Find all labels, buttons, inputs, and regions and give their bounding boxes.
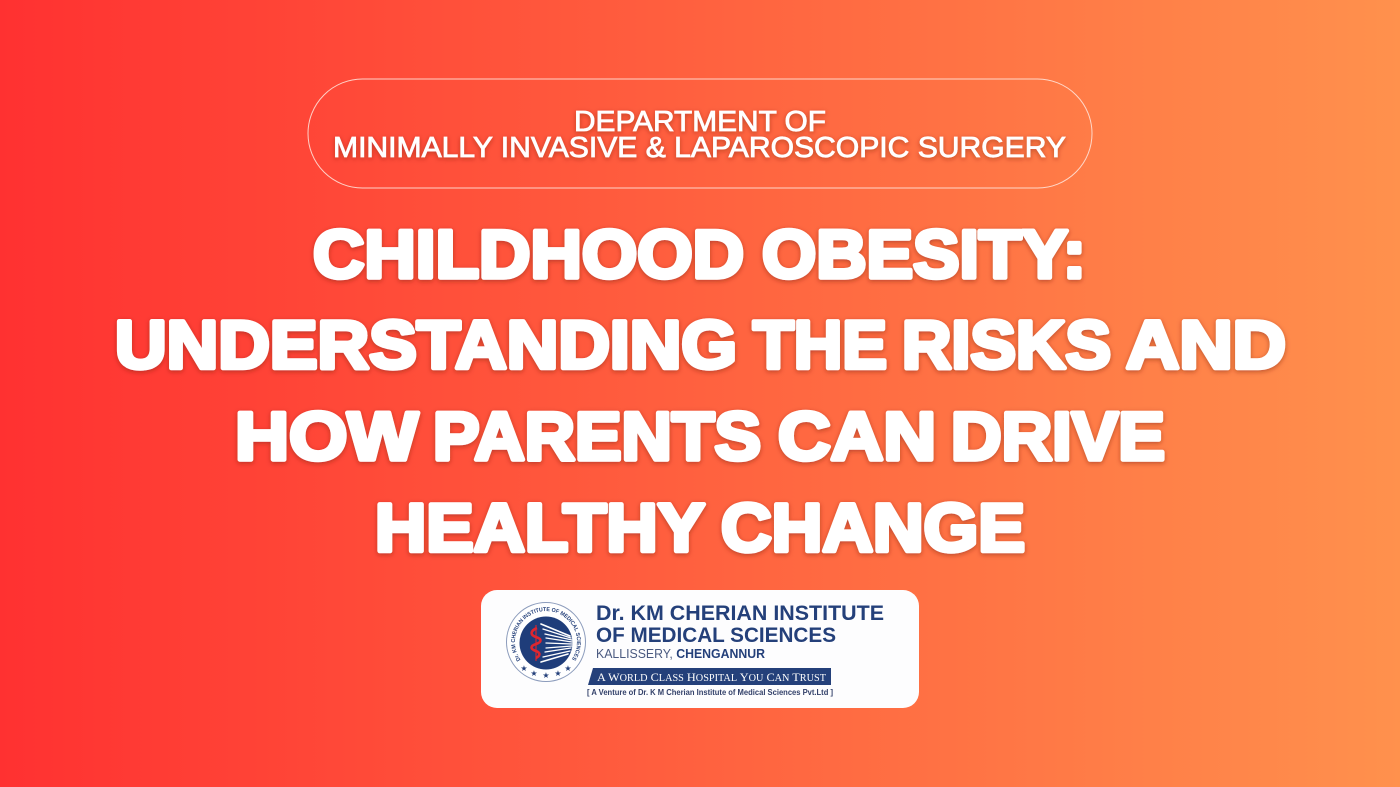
tagline banner: A WORLD CLASS HOSPITAL YOU CAN TRUST	[597, 670, 826, 684]
department text: DEPARTMENT OF	[574, 106, 826, 138]
card background	[481, 590, 919, 708]
title	[115, 217, 1286, 566]
department pill	[308, 79, 1092, 188]
title: HEALTHY	[375, 490, 705, 566]
icon: institute seal	[506, 602, 586, 682]
institute name: OF MEDICAL SCIENCES	[596, 624, 836, 647]
logo card	[481, 590, 919, 708]
institute name	[596, 602, 884, 647]
title: DRIVE	[951, 398, 1165, 474]
title: PARENTS	[433, 398, 761, 474]
department text	[333, 106, 1066, 164]
title: OBESITY:	[762, 217, 1086, 293]
institute name: Dr. KM CHERIAN INSTITUTE	[596, 602, 884, 625]
title: UNDERSTANDING	[115, 307, 737, 383]
department text: MINIMALLY INVASIVE & LAPAROSCOPIC SURGERY	[333, 132, 1066, 164]
title: RISKS	[902, 307, 1111, 383]
title: HOW	[235, 398, 419, 474]
stars: ★	[530, 669, 538, 678]
white fan rays	[541, 624, 572, 662]
red serpent staff	[532, 628, 540, 658]
title: CHANGE	[721, 490, 1025, 566]
stars: ★	[564, 664, 572, 673]
stars: ★	[542, 671, 550, 680]
stars: ★	[520, 664, 528, 673]
icon: institute seal: Dr. KM CHERIAN INSTITUTE OF MEDICAL SCIENCES	[511, 607, 581, 662]
title: CAN	[778, 398, 936, 474]
location: KALLISSERY, CHENGANNUR	[596, 646, 766, 661]
stars	[520, 664, 572, 680]
title: THE	[753, 307, 887, 383]
stars: ★	[554, 669, 562, 678]
title: AND	[1126, 307, 1286, 383]
pill outline	[308, 79, 1092, 188]
venture line: [ A Venture of Dr. K M Cherian Institute of Medical Sciences Pvt.Ltd ]	[587, 688, 833, 697]
title: CHILDHOOD	[313, 217, 744, 293]
